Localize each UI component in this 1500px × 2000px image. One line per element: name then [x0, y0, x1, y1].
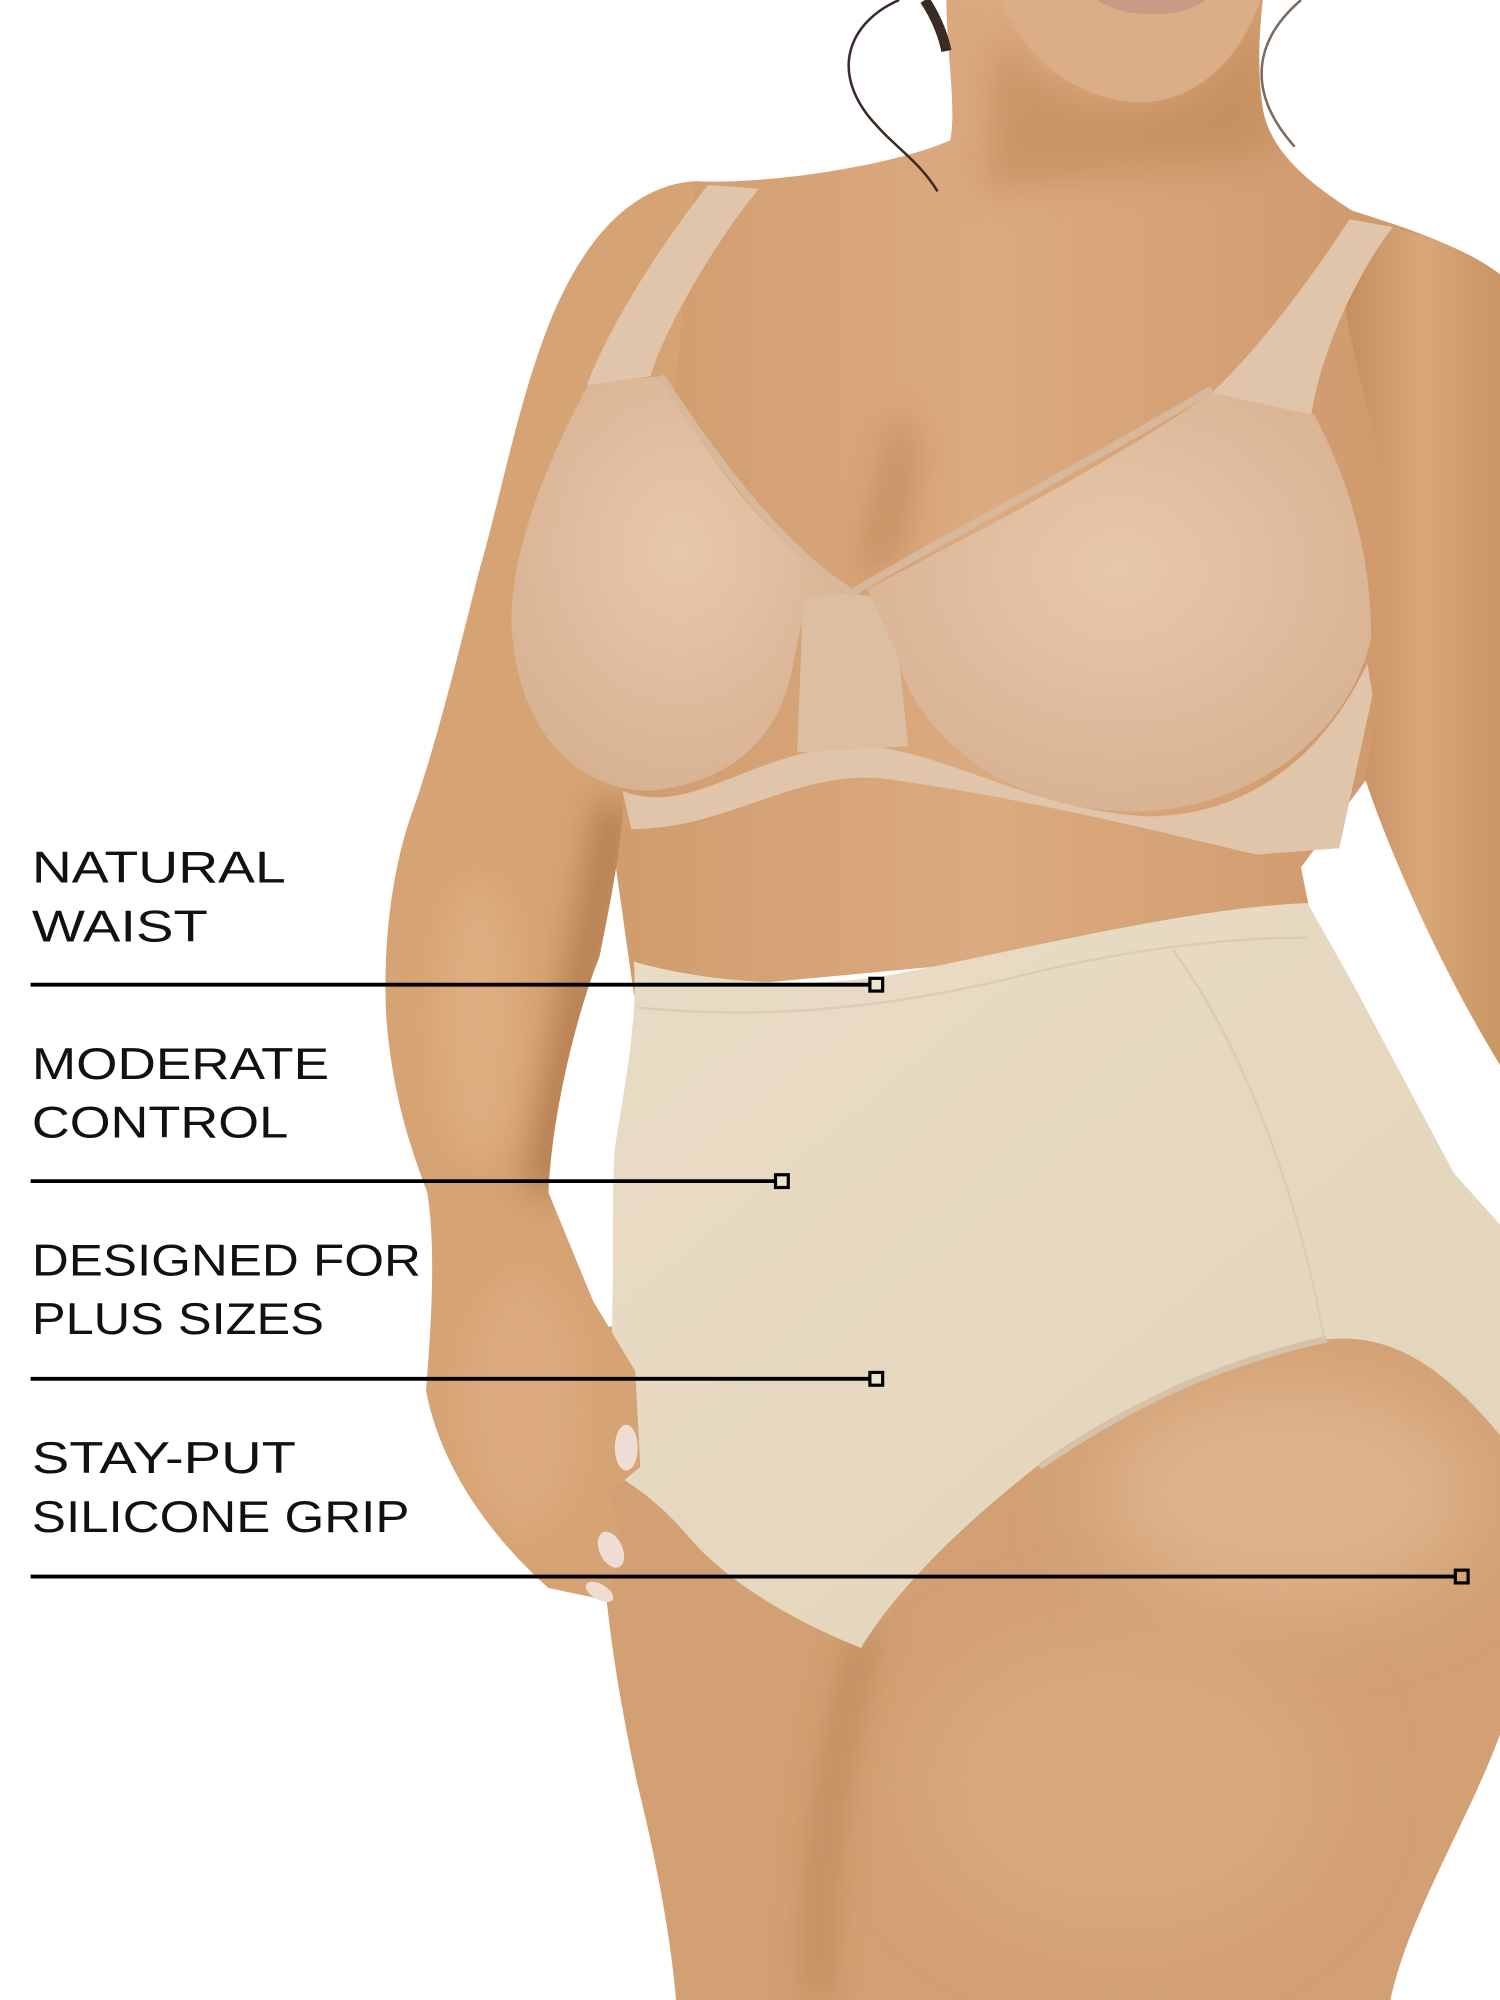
- silicone grip edge: [1040, 1339, 1327, 1467]
- callout: stay-put silicone grip: [31, 1434, 1468, 1583]
- shapewear brief: [602, 903, 1500, 1648]
- fingernails: [582, 1425, 638, 1606]
- centre gore: [797, 587, 908, 753]
- callout: stay-put silicone grip: SILICONE GRIP: [32, 1493, 409, 1542]
- torso and neck: [574, 0, 1500, 1065]
- lips: [1097, 0, 1205, 14]
- callout: natural waist: [31, 844, 883, 991]
- callout: moderate control: CONTROL: [32, 1099, 288, 1148]
- right arm: [1344, 223, 1500, 1065]
- callout: moderate control: [31, 1040, 788, 1188]
- left cup: [511, 376, 848, 791]
- side seam: [1173, 950, 1324, 1337]
- callout: natural waist: NATURAL: [32, 844, 286, 893]
- callout: natural waist: WAIST: [32, 902, 208, 951]
- right strap: [1212, 219, 1393, 415]
- callout: moderate control: MODERATE: [32, 1040, 329, 1089]
- face chin: [1001, 0, 1260, 102]
- callout: stay-put silicone grip: STAY-PUT: [32, 1434, 296, 1483]
- callout: designed for plus sizes: DESIGNED FOR: [32, 1237, 421, 1286]
- neck and chest shading: [857, 0, 1276, 580]
- bra band: [622, 663, 1372, 855]
- legs: [587, 1314, 1500, 2000]
- neckline trim: [661, 376, 1212, 593]
- callout: designed for plus sizes: [31, 1237, 883, 1385]
- model figure: [370, 0, 1500, 2000]
- bra: [511, 185, 1393, 855]
- waistband seam: [638, 938, 1309, 1013]
- right cup: [867, 393, 1371, 812]
- callout: designed for plus sizes: PLUS SIZES: [32, 1295, 324, 1344]
- left arm and hand: [386, 181, 695, 1598]
- left strap: [587, 185, 759, 385]
- hair wisps: [849, 0, 1301, 191]
